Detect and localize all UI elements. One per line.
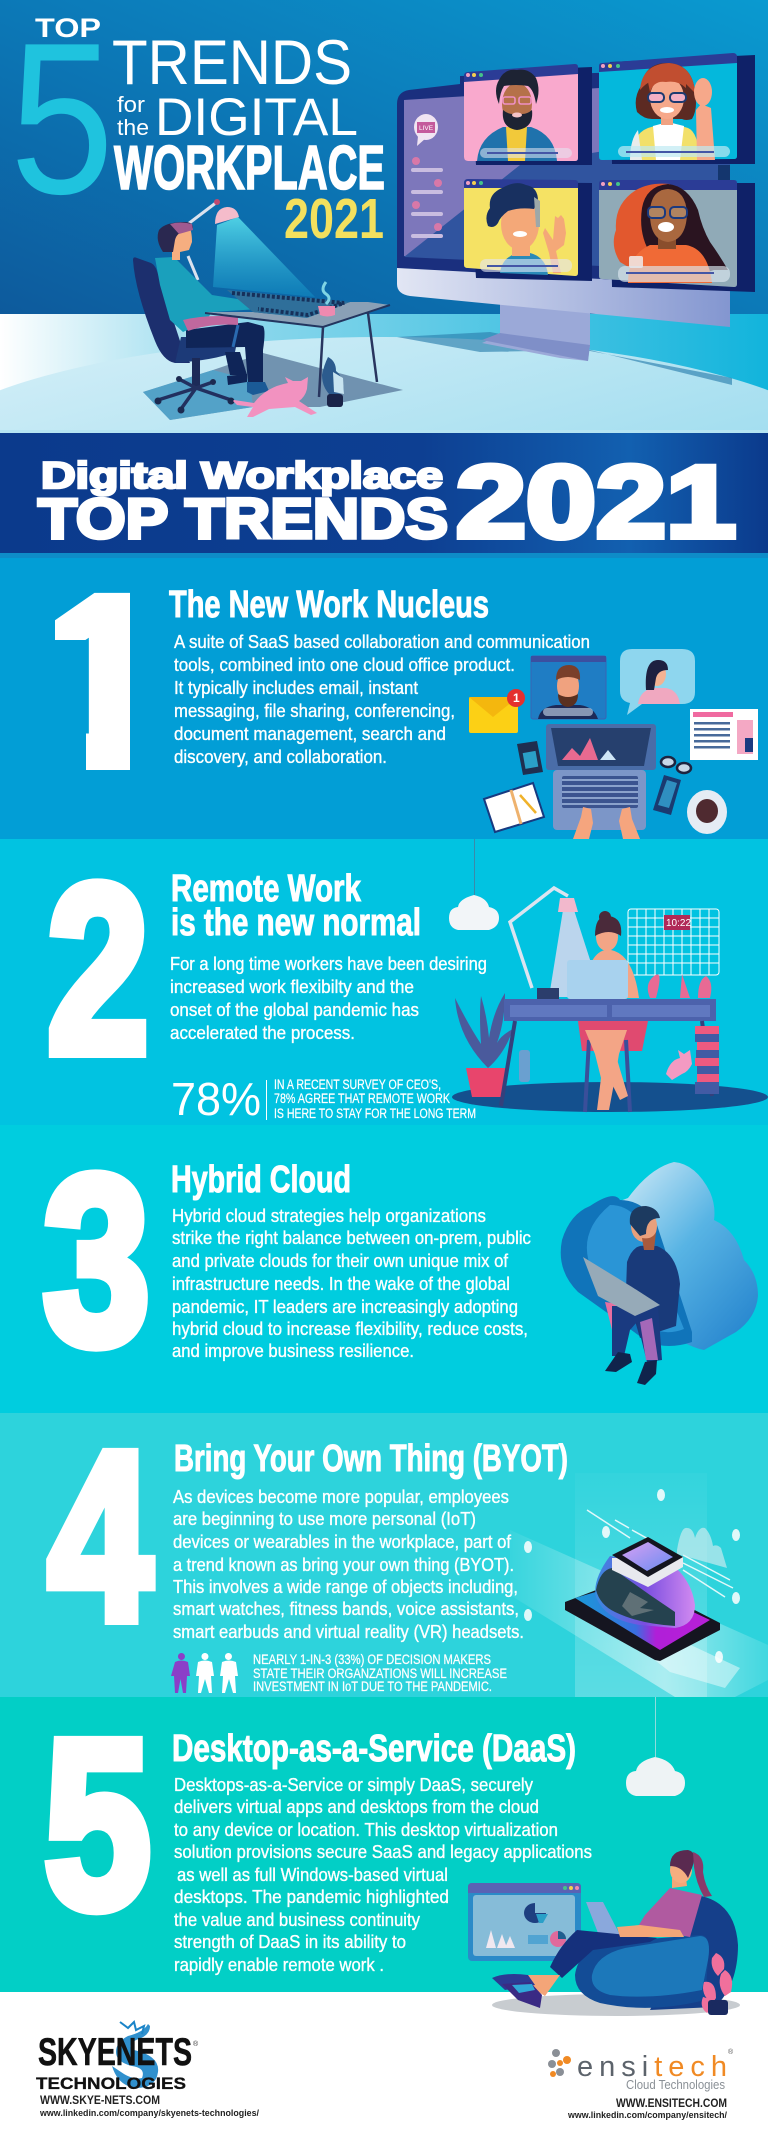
illustration: smartwatch and phone: [510, 1473, 768, 1697]
illustration: pink cat: [233, 377, 317, 417]
body text: solution provisions secure SaaS and legacy applications: [174, 1842, 592, 1862]
logo: Ensitech: www.linkedin.com/company/ensitech/: [567, 2110, 727, 2121]
heading: is the new normal: [171, 902, 421, 944]
stat callout: 78%: [171, 1073, 476, 1125]
stat callout: 78%: IS HERE TO STAY FOR THE LONG TERM: [274, 1106, 476, 1121]
body text: tools, combined into one cloud office product.: [174, 655, 515, 675]
logo: SkyeNets: www.linkedin.com/company/skyenets-technologies/: [39, 2108, 259, 2119]
body text: [173, 1487, 524, 1642]
body text: It typically includes email, instant: [174, 678, 418, 698]
numeral 2: 2: [47, 835, 149, 1103]
title: top 5 trends: for: [117, 92, 145, 117]
numeral 3: 3: [43, 1126, 150, 1394]
body text: and improve business resilience.: [172, 1341, 414, 1361]
heading: Remote Work: [171, 868, 362, 910]
title: top 5 trends: TRENDS: [112, 28, 352, 98]
stat text: STATE THEIR ORGANZATIONS WILL INCREASE: [253, 1666, 507, 1681]
logo: SkyeNets: TECHNOLOGIES: [36, 2074, 186, 2093]
logo: Ensitech: WWW.ENSITECH.COM: [616, 2096, 727, 2110]
banner heading: Digital Workplace: [41, 455, 443, 496]
body text: the value and business continuity: [174, 1910, 420, 1930]
body text: [170, 954, 487, 1043]
body text: As devices become more popular, employees: [173, 1487, 509, 1507]
body text: [174, 632, 590, 767]
numeral 4: 4: [48, 1402, 152, 1670]
illustration: woman at desk: [449, 839, 768, 1112]
numeral 5: 5: [44, 1690, 151, 1958]
body text: a trend known as bring your own thing (BYOT).: [173, 1555, 514, 1575]
stat callout: 78%: 78% AGREE THAT REMOTE WORK: [274, 1091, 450, 1106]
stat callout: 78%: IN A RECENT SURVEY OF CEO'S,: [274, 1077, 441, 1092]
logo: Ensitech: ®: [728, 2048, 734, 2056]
icon: live bubble: LIVE: [419, 125, 434, 132]
panel: trend 2: [0, 835, 768, 1125]
panel: hero header: [0, 0, 768, 603]
logo: SkyeNets: WWW.SKYE-NETS.COM: [40, 2095, 160, 2107]
body text: smart earbuds and virtual reality (VR) headsets.: [173, 1622, 524, 1642]
logo: SkyeNets: [36, 2022, 259, 2119]
stat text: INVESTMENT IN IoT DUE TO THE PANDEMIC.: [253, 1679, 492, 1694]
heading: Desktop-as-a-Service (DaaS): [172, 1728, 576, 1770]
title: top 5 trends: 5: [10, 0, 114, 239]
video tile: man waving on yellow: [464, 179, 592, 281]
panel: banner: [0, 433, 768, 559]
panel: trend 3: [0, 1125, 768, 1413]
body text: A suite of SaaS based collaboration and communication: [174, 632, 590, 652]
body text: strike the right balance between on-prem, public: [172, 1228, 531, 1248]
banner year: 2021: [456, 445, 736, 559]
title: top 5 trends: 2021: [284, 187, 384, 251]
body text: strength of DaaS in its ability to: [174, 1932, 406, 1952]
heading: Bring Your Own Thing (BYOT): [174, 1438, 568, 1480]
illustration: man in cloud: [561, 1162, 758, 1385]
title: top 5 trends: WORKPLACE: [114, 134, 385, 203]
logo: SkyeNets: ®: [193, 2040, 199, 2048]
panel: trend 4: [0, 1402, 768, 1698]
video tile: woman with curly hair: [599, 180, 755, 292]
body text: increased work flexibilty and the: [170, 977, 414, 997]
body text: hybrid cloud to increase flexibility, reduce costs,: [172, 1319, 528, 1339]
illustration: man at desk: [133, 199, 403, 420]
heading: Hybrid Cloud: [171, 1159, 351, 1201]
body text: and private clouds for their own unique mix of: [172, 1251, 509, 1271]
numeral 1: 1: [42, 547, 167, 815]
video tile: woman waving: [599, 53, 755, 164]
stat text: NEARLY 1-IN-3 (33%) OF DECISION MAKERS: [253, 1652, 491, 1667]
logo: SkyeNets: SKYENETS: [38, 2031, 192, 2074]
stat text: [253, 1652, 507, 1694]
icon: live bubble: [414, 114, 438, 146]
title: top 5 trends: DIGITAL: [155, 88, 358, 147]
illustration: monitor: [397, 70, 732, 385]
logo: Ensitech: [548, 2048, 734, 2121]
panel: trend 1: [0, 547, 768, 839]
body text: onset of the global pandemic has: [170, 1000, 419, 1020]
body text: messaging, file sharing, conferencing,: [174, 701, 455, 721]
logo: Ensitech: Cloud Technologies: [626, 2077, 725, 2092]
body text: desktops. The pandemic highlighted: [174, 1887, 449, 1907]
illustration: work devices: [469, 649, 758, 839]
heading: The New Work Nucleus: [169, 584, 489, 626]
illustration: work devices: 1: [513, 691, 520, 705]
body text: smart watches, fitness bands, voice assistants,: [173, 1599, 519, 1619]
panel: trend 5: [0, 1690, 768, 1992]
video tile: bearded man: [464, 64, 592, 165]
body text: as well as full Windows-based virtual: [177, 1865, 448, 1885]
body text: Desktops-as-a-Service or simply DaaS, securely: [174, 1775, 533, 1795]
body text: infrastructure needs. In the wake of the global: [172, 1274, 510, 1294]
body text: For a long time workers have been desiring: [170, 954, 487, 974]
heading: [171, 868, 421, 944]
body text: [172, 1206, 531, 1361]
body text: discovery, and collaboration.: [174, 747, 387, 767]
body text: This involves a wide range of objects including,: [173, 1577, 518, 1597]
body text: delivers virtual apps and desktops from the cloud: [174, 1797, 539, 1817]
stat callout: 78%: 78%: [171, 1073, 261, 1125]
body text: document management, search and: [174, 724, 446, 744]
logo: Ensitech: ensitech: [577, 2051, 727, 2083]
title: top 5 trends: TOP: [35, 13, 101, 43]
body text: accelerated the process.: [170, 1023, 355, 1043]
body text: pandemic, IT leaders are increasingly adopting: [172, 1297, 518, 1317]
panel: footer: [0, 1992, 768, 2135]
body text: to any device or location. This desktop virtualization: [174, 1820, 558, 1840]
icons: three people: [171, 1653, 238, 1693]
banner heading second line: TOP TRENDS: [38, 487, 448, 551]
title: top 5 trends: [10, 0, 385, 251]
body text: rapidly enable remote work .: [174, 1955, 384, 1975]
chat rows: [411, 157, 443, 238]
body text: Hybrid cloud strategies help organizations: [172, 1206, 486, 1226]
body text: [174, 1775, 592, 1975]
illustration: woman at desk: 10:22: [666, 918, 691, 929]
illustration: woman on bean bag: [468, 1697, 740, 2016]
body text: are beginning to use more personal (IoT): [173, 1509, 476, 1529]
body text: devices or wearables in the workplace, part of: [173, 1532, 512, 1552]
title: top 5 trends: the: [117, 115, 149, 140]
